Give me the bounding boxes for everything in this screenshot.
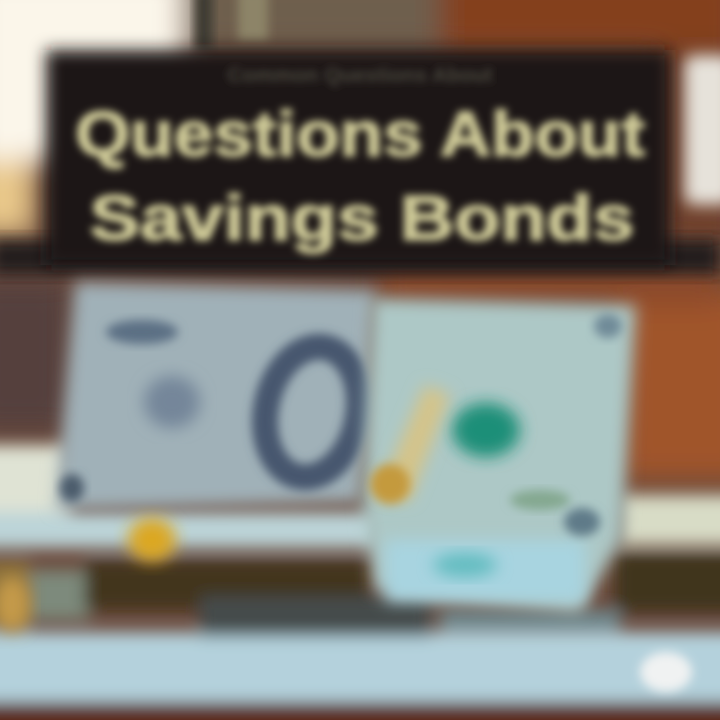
panel: dark title sign [46, 50, 670, 265]
gold coin [128, 518, 176, 562]
portrait seal [144, 376, 200, 428]
table surface [0, 445, 720, 720]
large zero numeral [253, 338, 371, 486]
small subtitle line: Common Questions About [227, 64, 493, 87]
title: Savings Bonds [90, 182, 634, 254]
savings bond: right half [362, 298, 636, 612]
white logo badge [640, 652, 692, 692]
green seal [452, 403, 520, 457]
gold ribbon [378, 385, 450, 500]
white card at right [684, 55, 720, 205]
corner mark [106, 320, 178, 344]
gold coin left [0, 576, 30, 632]
savings bond: left half [55, 282, 375, 510]
title [75, 98, 645, 254]
title: Questions About [75, 98, 645, 170]
